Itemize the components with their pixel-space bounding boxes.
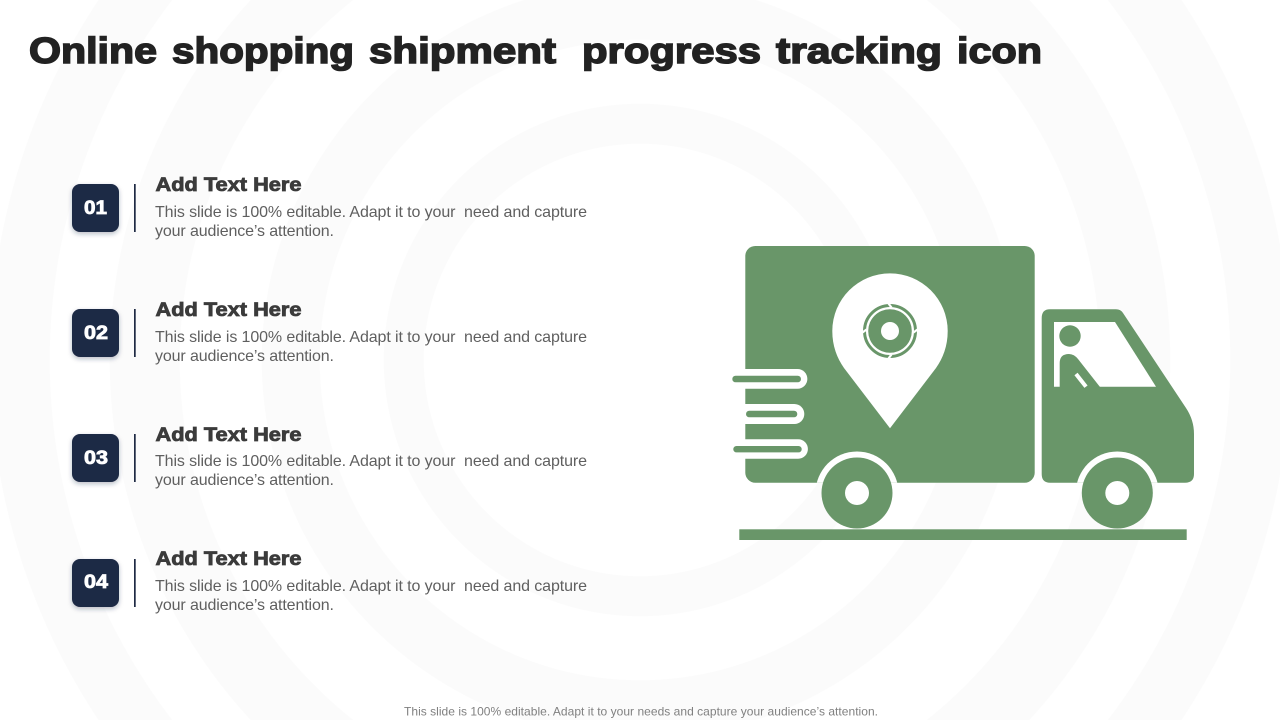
title bbox=[29, 30, 1042, 71]
item 02 bbox=[72, 300, 587, 365]
item 01 bbox=[72, 175, 587, 240]
badge 03 bbox=[72, 434, 119, 482]
heading 04: Add Text Here bbox=[156, 549, 302, 570]
badge 02 bbox=[72, 309, 119, 357]
description 03 bbox=[155, 453, 587, 489]
rear wheel bbox=[816, 452, 898, 534]
description 04 bbox=[155, 578, 587, 614]
title: tracking bbox=[776, 30, 942, 71]
title: Online bbox=[29, 30, 157, 71]
road bbox=[739, 529, 1187, 540]
cab window with driver bbox=[1054, 322, 1156, 387]
title: shipment bbox=[369, 30, 556, 71]
title: icon bbox=[957, 30, 1042, 71]
description 01: This slide is 100% editable. Adapt it to your need and capture bbox=[155, 204, 587, 221]
description 03: your audience’s attention. bbox=[155, 472, 334, 489]
description 02: This slide is 100% editable. Adapt it to your need and capture bbox=[155, 329, 587, 346]
badge 04 bbox=[72, 559, 119, 607]
description 01: your audience’s attention. bbox=[155, 223, 334, 240]
item 03 bbox=[72, 425, 587, 489]
cargo box bbox=[745, 246, 1035, 483]
badge 04: 04 bbox=[84, 572, 108, 593]
description 03: This slide is 100% editable. Adapt it to your need and capture bbox=[155, 453, 587, 470]
front wheel bbox=[1077, 452, 1158, 528]
description 01 bbox=[155, 204, 587, 240]
title: progress bbox=[582, 30, 761, 71]
icon: location pin bbox=[832, 273, 948, 428]
heading 01: Add Text Here bbox=[156, 175, 302, 196]
speed lines bbox=[732, 369, 808, 459]
badge 02: 02 bbox=[84, 323, 108, 344]
description 04: This slide is 100% editable. Adapt it to your need and capture bbox=[155, 578, 587, 595]
truck cab bbox=[1042, 309, 1194, 483]
description 04: your audience’s attention. bbox=[155, 597, 334, 614]
heading 02: Add Text Here bbox=[156, 300, 302, 321]
description 02: your audience’s attention. bbox=[155, 348, 334, 365]
badge 01: 01 bbox=[84, 198, 107, 219]
footer note: This slide is 100% editable. Adapt it to your needs and capture your audience’s attention. bbox=[404, 704, 878, 718]
description 02 bbox=[155, 329, 587, 365]
badge 01 bbox=[72, 184, 119, 232]
badge 03: 03 bbox=[84, 448, 108, 469]
heading 03: Add Text Here bbox=[156, 425, 302, 446]
title: shopping bbox=[172, 30, 354, 71]
icon: delivery truck with location pin bbox=[732, 246, 1194, 540]
item 04 bbox=[72, 549, 587, 614]
